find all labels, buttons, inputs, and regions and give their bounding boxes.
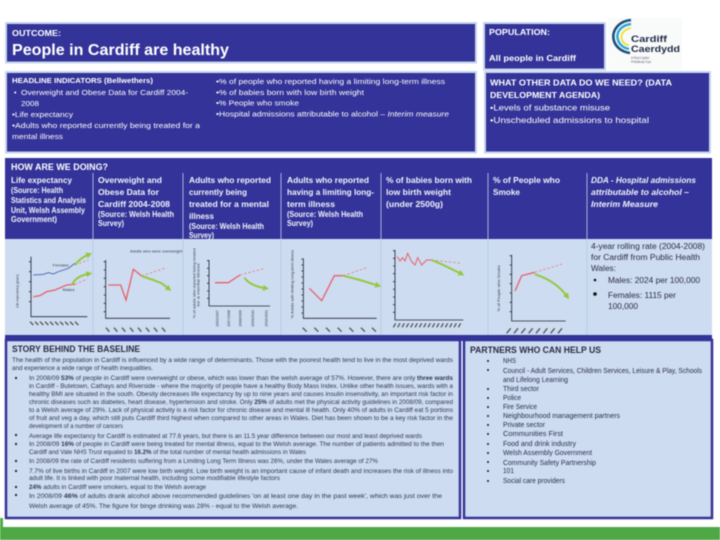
column: mental illness: currently being (189, 188, 247, 197)
footer band (0, 518, 720, 540)
icon: Cardiff Caerdydd logo: Cardiff (631, 34, 668, 45)
icon: Cardiff Caerdydd logo (608, 18, 682, 70)
column: life expectancy: Government) (11, 215, 57, 224)
column: mental illness: illness (189, 212, 214, 221)
indicator list left: 2008 (21, 101, 39, 108)
partners list: Food and drink industry (503, 441, 576, 448)
chart: overweight: Adults who were overweight (130, 249, 182, 253)
story bullets: development of a number of cancers (29, 423, 123, 430)
alcohol rates text: 100,000 (608, 302, 639, 311)
partners list: Social care providers (503, 478, 565, 485)
column: limiting long-term illness: term illness (287, 200, 335, 209)
chart: smoking: % of People who Smoke (497, 265, 501, 312)
partners heading: PARTNERS WHO CAN HELP US (470, 345, 601, 356)
panel: outcome (6, 23, 476, 62)
icon: Cardiff Caerdydd logo: Caerdydd (631, 44, 680, 55)
chart: smoking (497, 255, 567, 333)
icon: Cardiff Caerdydd logo: Prifddinas Fyw (631, 60, 652, 64)
alcohol rates text: Wales: (591, 264, 616, 273)
agenda list: •Unscheduled admissions to hospital (490, 115, 649, 125)
column: mental illness: treated for a mental (189, 200, 269, 209)
chart: mental illness: 2007/2008 (227, 310, 231, 327)
indicator list left: •Life expectancy (12, 112, 74, 119)
panel: population (484, 23, 605, 70)
column: overweight: (Source: Welsh Health (98, 210, 174, 219)
column: limiting long-term illness: Survey) (287, 219, 313, 228)
chart: mental illness: 2003/2007 (215, 310, 219, 327)
partners list: Fire Service (503, 404, 537, 411)
indicator list left: Overweight and Obese Data for Cardiff 2004- (21, 90, 189, 97)
chart: mental illness: % of adults who reported being treated (192, 248, 196, 318)
indicator list right: •% of people who reported having a limiting long-term illness (216, 79, 446, 86)
column: smoking: % of People who (493, 176, 560, 185)
agenda heading: DEVELOPMENT AGENDA) (490, 90, 600, 100)
chart: mental illness (192, 248, 270, 327)
chart: low birth weight (393, 250, 463, 327)
agenda list (490, 102, 649, 125)
panel: story behind the baseline (6, 340, 460, 518)
population value: All people in Cardiff (489, 53, 576, 63)
column: overweight: Obese Data for (98, 188, 160, 197)
indicator list right: •% People who smoke (216, 100, 299, 108)
partners list (487, 358, 702, 485)
story bullets (15, 375, 454, 510)
panel: how are we doing (5, 158, 712, 341)
agenda heading (490, 78, 672, 100)
column: mental illness: Adults who reported (189, 176, 271, 185)
column: limiting long-term illness (287, 176, 374, 228)
chart: life expectancy: Females (53, 263, 69, 267)
column: low birth weight (386, 176, 472, 209)
chart: mental illness: 2009/2010 (251, 310, 255, 327)
chart: mental illness: 2010/2011 (264, 310, 268, 327)
indicator list left: • (14, 90, 17, 97)
column: life expectancy: (Source: Health (11, 186, 63, 195)
story bullets: to a Welsh average of 29%. Lack of physical activity is a risk factor for chronic disease and mental ill health. Only 40% of adults in Cardiff eat 5 portions (29, 407, 453, 414)
column: overweight: Survey) (98, 219, 124, 228)
column: smoking: Smoke (493, 188, 520, 197)
story bullets: healthy BMI are situated in the south. Obesity decreases life expectancy by up to nine years and causes insulin insensitivity, an important risk factor in (29, 391, 454, 398)
column: life expectancy: Unit, Welsh Assembly (11, 206, 85, 215)
column: limiting long-term illness: Adults who reported (287, 176, 369, 185)
partners list: 101 (503, 468, 514, 475)
story bullets: In 2008/09 the rate of Cardiff residents suffering from a Limiting Long Term Illness was 26%, under the Wales average of 27% (29, 458, 378, 465)
story bullets: adult life. It is linked with poor maternal health, including some modifiable lifestyle factors (29, 475, 280, 482)
partners list: and Lifelong Learning (503, 377, 568, 384)
chart: life expectancy (15, 254, 89, 325)
icon: Cardiff Caerdydd logo: A Real Capital (631, 56, 649, 60)
agenda heading: WHAT OTHER DATA DO WE NEED? (DATA (490, 78, 672, 88)
story bullets: of fruit and veg a day, which still puts Cardiff third highest when compared to other areas in Wales. Diet has been shown to be a key risk factor in the (29, 415, 454, 422)
column: overweight: Cardiff 2004-2008 (98, 200, 170, 209)
story bullets: 24% adults in Cardiff were smokers, equal to the Welsh average (29, 484, 207, 491)
column: life expectancy: Statistics and Analysis (11, 196, 86, 205)
partners list: Community Safety Partnership (503, 460, 596, 467)
story bullets: In 2008/09 46% of adults drank alcohol above recommended guidelines 'on at least one day in the past week', which was just over the (29, 493, 443, 500)
title: People in Cardiff are healthy (12, 42, 229, 59)
population label: POPULATION: (489, 27, 550, 37)
chart: mental illness: for a mental illness (196, 263, 200, 307)
story bullets: Average life expectancy for Cardiff is estimated at 77.6 years, but there is an 11.5 year difference between our most and least deprived wards (29, 433, 422, 440)
column: life expectancy: Life expectancy (11, 176, 72, 185)
column: mental illness: (Source: Welsh Health (189, 222, 264, 231)
column: low birth weight: low birth weight (386, 188, 451, 197)
chart: overweight (104, 249, 182, 332)
partners list: Welsh Assembly Government (503, 450, 592, 457)
panel: data development agenda (485, 72, 710, 152)
chart: limiting long-term illness (290, 250, 378, 332)
chart: limiting long-term illness: % Adults with limiting long-term illness (290, 250, 294, 318)
column: low birth weight: % of babies born with (386, 176, 472, 185)
column: smoking (493, 176, 560, 197)
column: alcohol admissions: attributable to alcohol – (591, 188, 689, 197)
partners list: Communities First (503, 431, 563, 438)
column: limiting long-term illness: having a limiting long- (287, 188, 374, 197)
story heading: STORY BEHIND THE BASELINE (12, 344, 140, 355)
alcohol rates text: Males: 2024 per 100,000 (608, 276, 701, 285)
indicator list left (12, 90, 200, 141)
story bullets: In 2008/09 16% of people in Cardiff were being treated for mental illness, equal to the Welsh average. The number of patients admitted to the then (29, 441, 445, 448)
chart: mental illness: 2008/2009 (239, 310, 243, 327)
partners list: Police (503, 395, 521, 402)
partners list: Private sector (503, 422, 546, 429)
panel: partners who can help us (464, 340, 712, 518)
partners list: Third sector (503, 386, 540, 393)
indicator list left: •Adults who reported currently being treated for a (12, 123, 200, 130)
column: life expectancy (11, 176, 86, 224)
story bullets: 7.7% of live births in Cardiff in 2007 were low birth weight. Low birth weight is an important cause of infant death and increases the risk of illness into (29, 468, 454, 475)
story bullets: in Cardiff - Butetown, Cathays and Riverside - where the majority of people have a healthy Body Mass Index. Unlike other health issues, wards with a (29, 383, 454, 390)
story bullets: Welsh average of 45%. The figure for binge drinking was 28% - equal to the Welsh average. (29, 503, 298, 510)
indicator list right (216, 79, 449, 118)
column: limiting long-term illness: (Source: Welsh Health (287, 210, 363, 219)
story intro: The health of the population in Cardiff is influenced by a wide range of determinants. Those with the poorest health tend to live in the most deprived wards (12, 357, 453, 364)
alcohol rates text: Females: 1115 per (608, 291, 676, 300)
column: alcohol admissions (591, 176, 696, 209)
section heading: HOW ARE WE DOING? (11, 162, 108, 173)
partners list: Council - Adult Services, Children Services, Leisure & Play, Schools (503, 368, 702, 375)
indicator list right: •% of babies born with low birth weight (216, 90, 364, 97)
story bullets: chronic diseases such as diabetes, heart disease, hypertension and stroke. Only 25% of adults met the physical activity guidelines in 2008/09, compared (29, 399, 454, 406)
story intro: and experience a wide range of health inequalities. (12, 365, 153, 372)
alcohol rates text (591, 242, 705, 311)
outcome label: OUTCOME: (12, 28, 61, 38)
panel: headline indicators (6, 72, 476, 152)
column: alcohol admissions: Interim Measure (591, 200, 658, 209)
story bullets: Cardiff and Vale NHS Trust equated to 16.2% of the total number of mental health admissions in Wales (29, 449, 306, 456)
column: low birth weight: (under 2500g) (386, 200, 443, 209)
partners list: NHS (503, 358, 516, 365)
indicator list left: mental illness (12, 134, 64, 141)
story intro (12, 357, 453, 372)
story bullets: In 2008/09 53% of people in Cardiff were overweight or obese, which was lower than the welsh average of 57%. However, there are only three wards (29, 375, 454, 382)
column: mental illness: Survey) (189, 231, 214, 240)
chart: life expectancy: Males (63, 288, 75, 292)
alcohol rates text: 4-year rolling rate (2004-2008) (591, 242, 705, 251)
column: alcohol admissions: DDA - Hospital admissions (591, 176, 696, 185)
alcohol rates text: for Cardiff from Public Health (591, 253, 700, 262)
headline heading: HEADLINE INDICATORS (Bellwethers) (12, 78, 153, 85)
indicator list right: •Hospital admissions attributable to alcohol – Interim measure (216, 112, 449, 118)
agenda list: •Levels of substance misuse (490, 102, 610, 112)
column: mental illness (189, 176, 271, 240)
partners list: Neighbourhood management partners (503, 413, 620, 420)
chart: life expectancy: Life expectancy (years) (15, 274, 19, 308)
column: overweight (98, 176, 174, 228)
column: overweight: Overweight and (98, 176, 162, 185)
